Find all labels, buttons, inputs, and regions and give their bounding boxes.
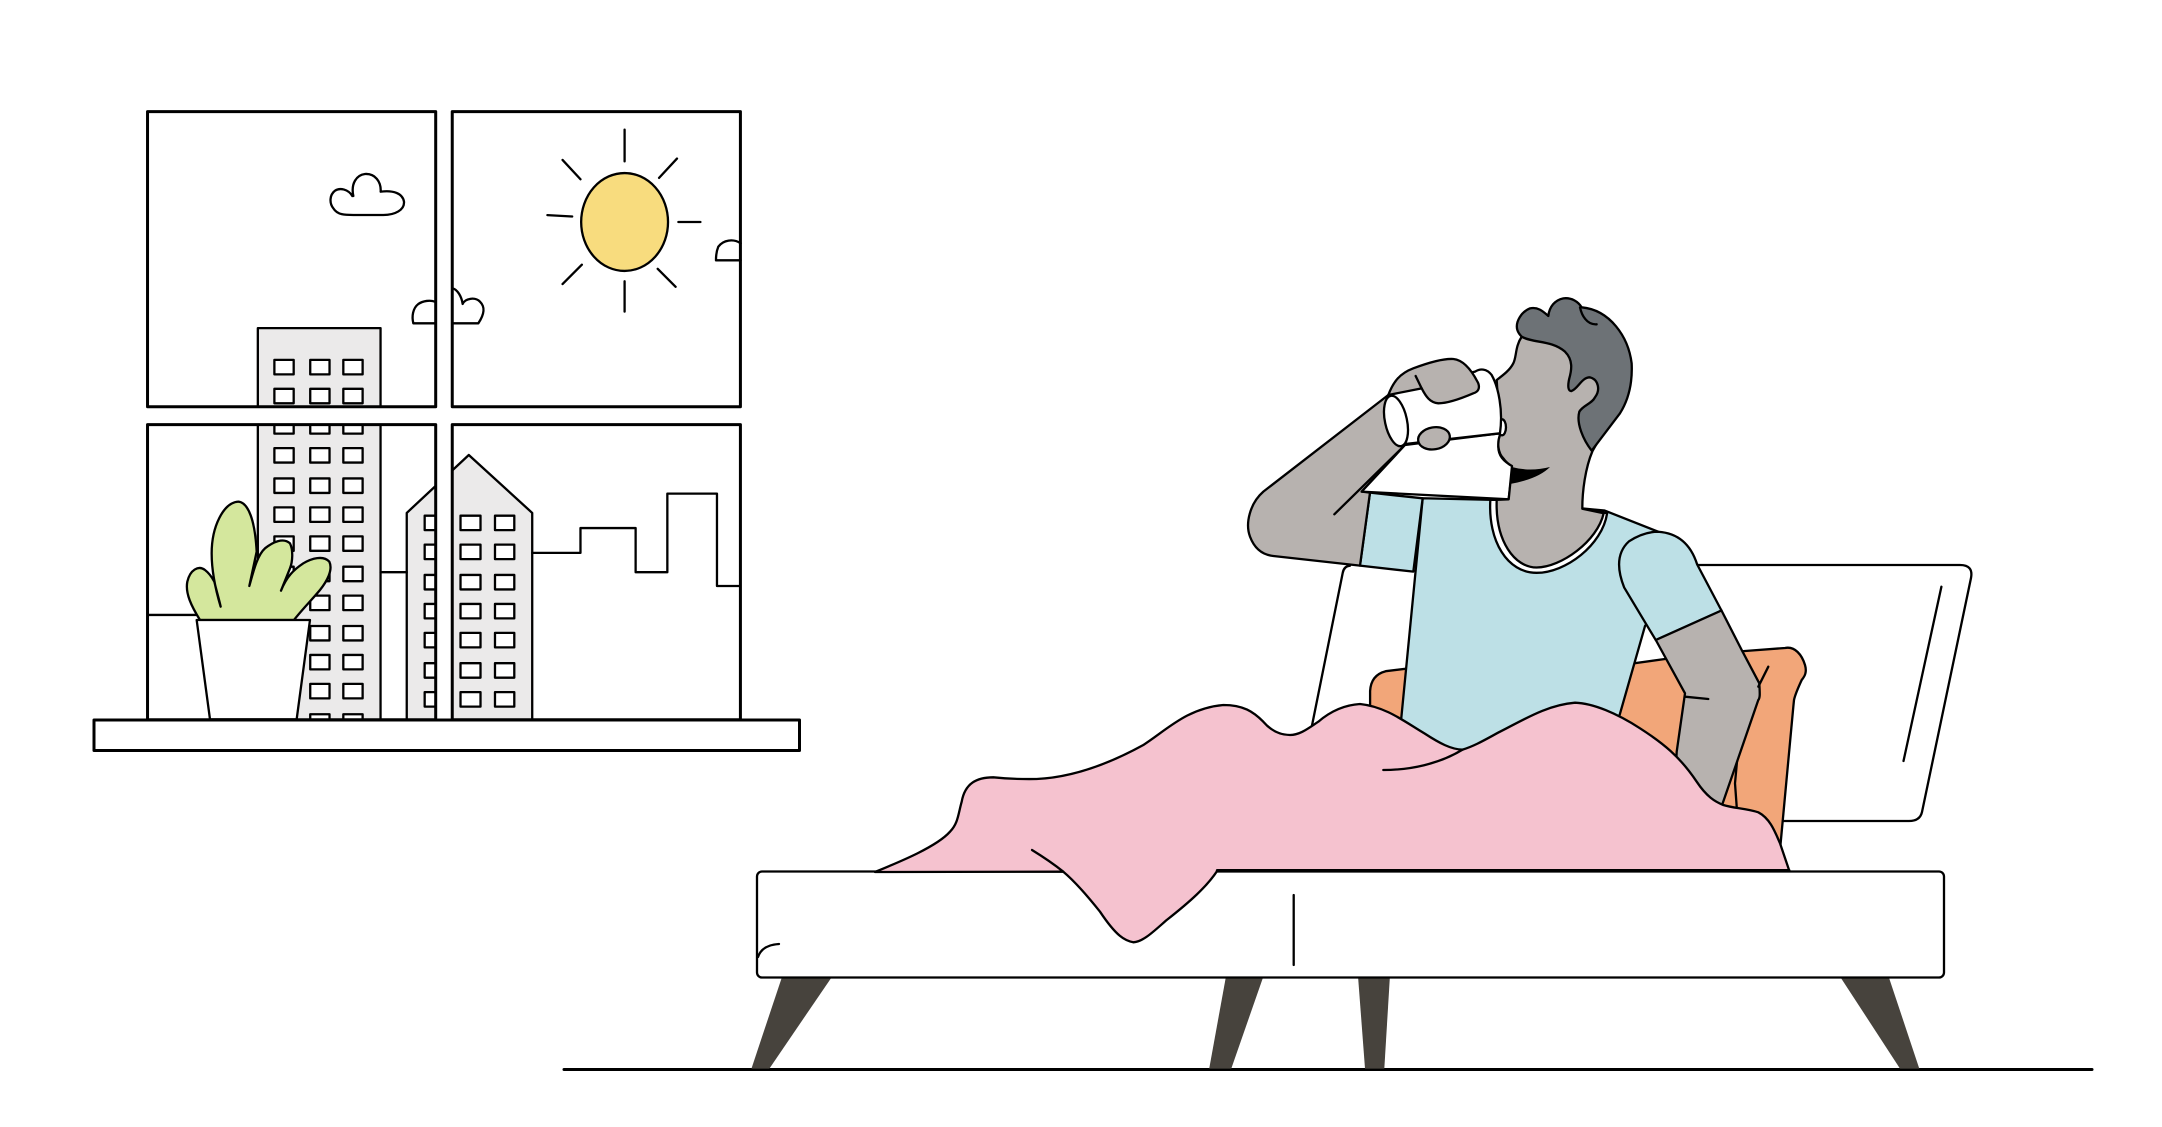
raised arm [1248, 395, 1405, 566]
pillow [1370, 648, 1806, 850]
person drinking [1248, 298, 1768, 840]
mouth [1510, 467, 1550, 484]
forearm line [1334, 444, 1406, 514]
finger line [1416, 376, 1422, 388]
right arm [1656, 610, 1768, 840]
hair [1517, 298, 1632, 451]
pointed building [407, 455, 532, 731]
cup [1388, 369, 1501, 444]
fingers [1388, 359, 1479, 403]
pot [197, 620, 310, 719]
skyline outline [148, 494, 745, 615]
potted plant [187, 502, 331, 719]
lip [1498, 419, 1506, 435]
thumb [1416, 425, 1452, 452]
blanket [875, 703, 1789, 942]
left sleeve [1360, 493, 1423, 572]
tall building [258, 328, 381, 729]
illustration [92, 110, 2094, 1071]
blanket fold [1383, 750, 1463, 770]
torso [1401, 498, 1697, 799]
city skyline [148, 328, 745, 731]
blanket edge [1032, 850, 1063, 872]
window panes [148, 112, 740, 720]
gap under cup [1362, 433, 1513, 499]
sun [547, 130, 700, 312]
leaves [187, 502, 331, 620]
clouds [331, 174, 741, 323]
mattress [757, 872, 1944, 978]
window with city view [148, 112, 745, 731]
floor line [564, 1068, 2092, 1071]
cup in hand [1380, 359, 1506, 452]
window sill [94, 720, 800, 750]
edge over mattress [1217, 869, 1789, 872]
head and neck [1497, 337, 1610, 568]
cup rim [1380, 394, 1412, 448]
headboard [1312, 565, 1971, 821]
clouds behind window bars [413, 240, 741, 323]
right sleeve [1619, 532, 1721, 640]
bed [751, 565, 1971, 1069]
bed legs [751, 978, 1919, 1069]
left sleeve and raised arm [1248, 395, 1513, 572]
cloud upper left [331, 174, 404, 215]
collar [1490, 500, 1607, 573]
